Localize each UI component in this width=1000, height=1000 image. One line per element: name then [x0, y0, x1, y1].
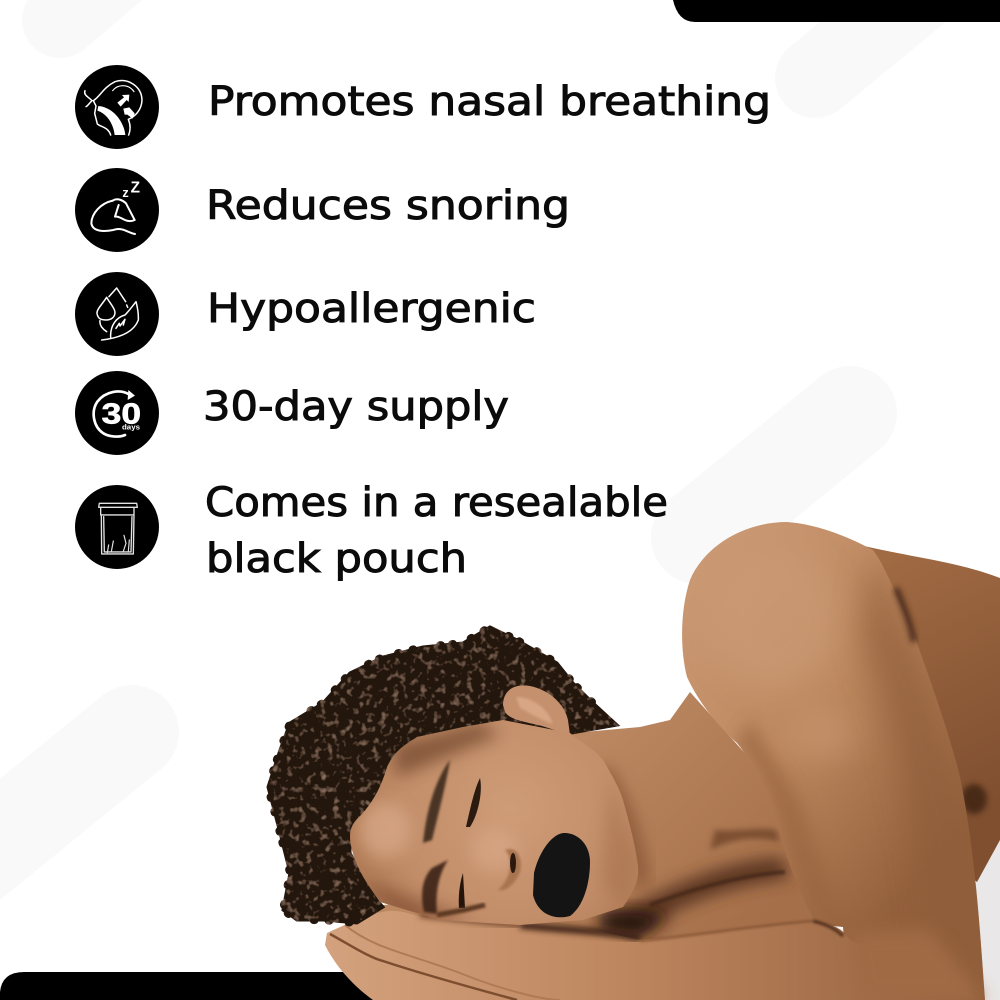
text: comes in a resealable black pouch: Comes in a resealable: [205, 480, 668, 526]
eyebrows, eyes and nose: [422, 760, 521, 915]
face: [350, 720, 640, 925]
hair: [268, 627, 617, 923]
text: hypoallergenic: Hypoallergenic: [207, 286, 536, 332]
icon: nasal breathing: [75, 65, 159, 149]
text: reduces snoring: Reduces snoring: [206, 183, 570, 229]
icon: snoring: Z: [131, 179, 140, 196]
top black bar: [673, 0, 1000, 22]
upper arm and shoulder: [682, 522, 990, 1000]
icon: snoring: [75, 168, 159, 252]
white sheet at lower right: [975, 835, 1000, 1000]
icon: resealable pouch: [75, 485, 159, 569]
text: 30-day supply: 30-day supply: [203, 384, 509, 430]
icon: hypoallergenic drop and leaf: [75, 272, 159, 356]
mouth tape: [533, 833, 590, 917]
bottom black bar: [0, 972, 380, 1000]
neck and chest shading: [600, 770, 790, 938]
icon: snoring: z: [122, 186, 129, 200]
body base silhouette: [327, 692, 850, 1000]
icon: 30 days: 30: [102, 398, 141, 430]
text: promotes nasal breathing: Promotes nasal breathing: [208, 79, 771, 125]
icon: 30 days: days: [122, 422, 140, 431]
forearm and hands: [325, 911, 985, 1000]
ear: [503, 685, 570, 735]
photo: sleeping man with mouth tape: [268, 522, 1000, 1000]
text: comes in a resealable black pouch: black pouch: [206, 536, 467, 582]
torso behind the arm: [860, 545, 1000, 882]
icon: 30 days: [75, 371, 159, 455]
text: comes in a resealable black pouch: [205, 480, 668, 582]
